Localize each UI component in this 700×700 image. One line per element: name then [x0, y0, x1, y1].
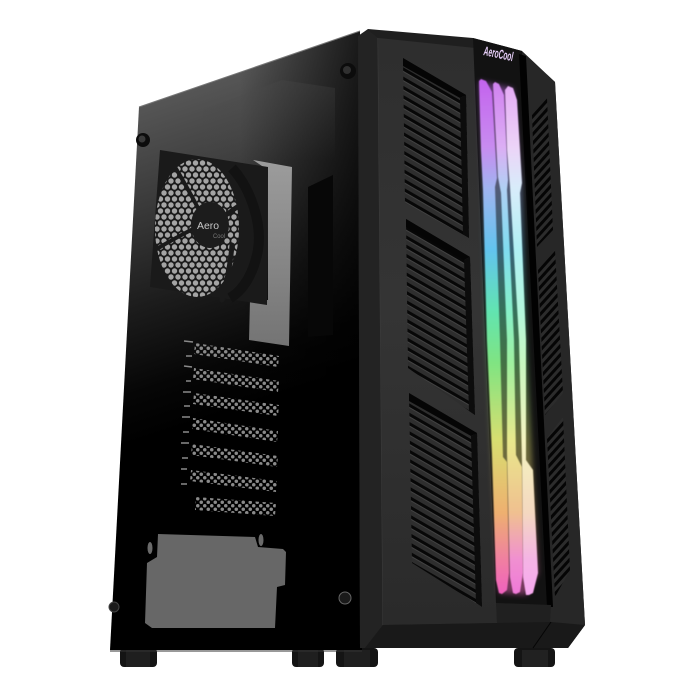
right side panel: [522, 52, 585, 648]
vent: front upper: [403, 58, 469, 238]
fan hub: [191, 202, 229, 248]
fan ring: [230, 168, 259, 298]
RGB glow: [479, 81, 538, 595]
interior cut-out right: [308, 175, 333, 337]
vent: front middle: [406, 219, 475, 415]
black gap: [519, 54, 553, 607]
PSU opening: [145, 534, 286, 628]
foot: front left: [336, 648, 378, 667]
top panel interior: [203, 80, 335, 160]
bright cable cut-out: [249, 160, 292, 346]
screw: bottom left: [109, 602, 119, 612]
PCI slot covers: [190, 343, 279, 516]
brand logo: AeroCool: AeroCool: [482, 43, 515, 64]
lower panel below channel: [496, 603, 551, 623]
left strip: [358, 30, 383, 648]
fan blades: [155, 162, 240, 300]
base fill: [358, 29, 585, 648]
RGB channel: [473, 38, 552, 606]
RGB bar 1: [479, 79, 509, 594]
vent: side lower: [547, 417, 570, 597]
RGB bar 2: [493, 82, 523, 594]
slot latches: [181, 341, 193, 484]
screw: top right: [340, 63, 356, 79]
screw: bottom right: [339, 592, 351, 604]
foot: front right: [514, 648, 555, 667]
foot: rear left: [120, 648, 157, 667]
vent: side middle: [538, 250, 563, 415]
bottom bevel: [365, 622, 585, 648]
panel: tempered glass side: [109, 31, 362, 651]
vent: side upper: [532, 98, 553, 247]
RGB light bars: [479, 79, 538, 595]
vent: front lower: [409, 393, 482, 607]
panel: front bezel: [358, 29, 585, 648]
fan logo: [197, 221, 225, 240]
foot: rear right: [292, 648, 324, 667]
fan logo: Cool: [213, 234, 225, 240]
RGB bar 3: [505, 86, 538, 595]
main front panel: [378, 38, 497, 625]
fan: [150, 150, 268, 305]
fan logo: Aero: [197, 221, 219, 232]
screw: top left: [136, 133, 150, 147]
